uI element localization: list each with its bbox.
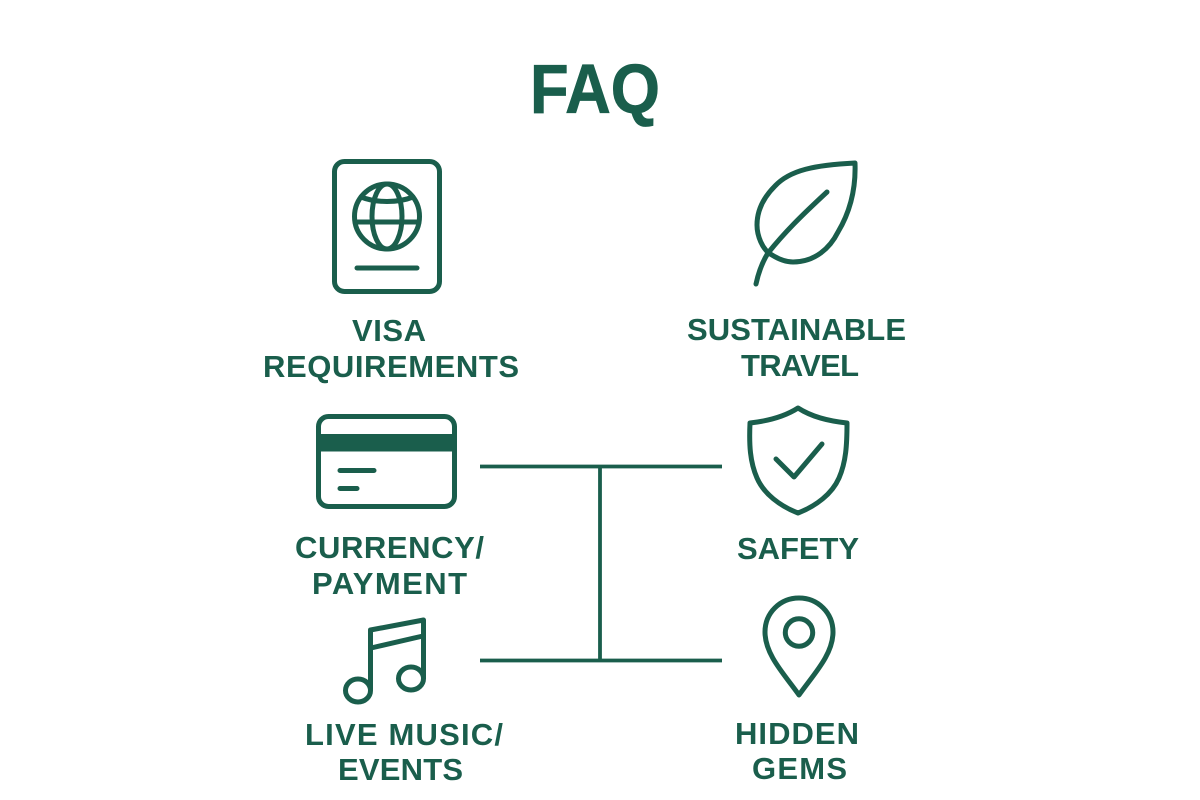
label: hidden gems: GEMS <box>752 751 847 786</box>
connector: T-shaped lines <box>480 466 722 660</box>
icon: leaf <box>756 163 855 284</box>
title: FAQ <box>530 50 660 128</box>
icon: music notes <box>346 620 424 702</box>
label: currency payment <box>295 530 484 601</box>
label: sustainable travel: SUSTAINABLE <box>687 312 906 347</box>
label: visa requirements <box>263 313 519 384</box>
label: live music events: EVENTS <box>338 752 463 787</box>
icon: credit card <box>318 416 455 506</box>
label: hidden gems: HIDDEN <box>735 716 859 751</box>
label: currency payment: CURRENCY/ <box>295 530 484 565</box>
icon: shield with check <box>750 408 847 513</box>
icon: passport <box>334 162 440 292</box>
label: live music events: LIVE MUSIC/ <box>305 717 503 752</box>
label: visa requirements: REQUIREMENTS <box>263 349 519 384</box>
label: safety: SAFETY <box>737 531 859 566</box>
label: visa requirements: VISA <box>352 313 426 348</box>
label: currency payment: PAYMENT <box>312 566 467 601</box>
icon: map pin <box>765 598 833 695</box>
label: sustainable travel: TRAVEL <box>741 348 859 383</box>
label: hidden gems <box>735 716 859 786</box>
label: live music events <box>305 717 503 787</box>
label: sustainable travel <box>687 312 906 383</box>
